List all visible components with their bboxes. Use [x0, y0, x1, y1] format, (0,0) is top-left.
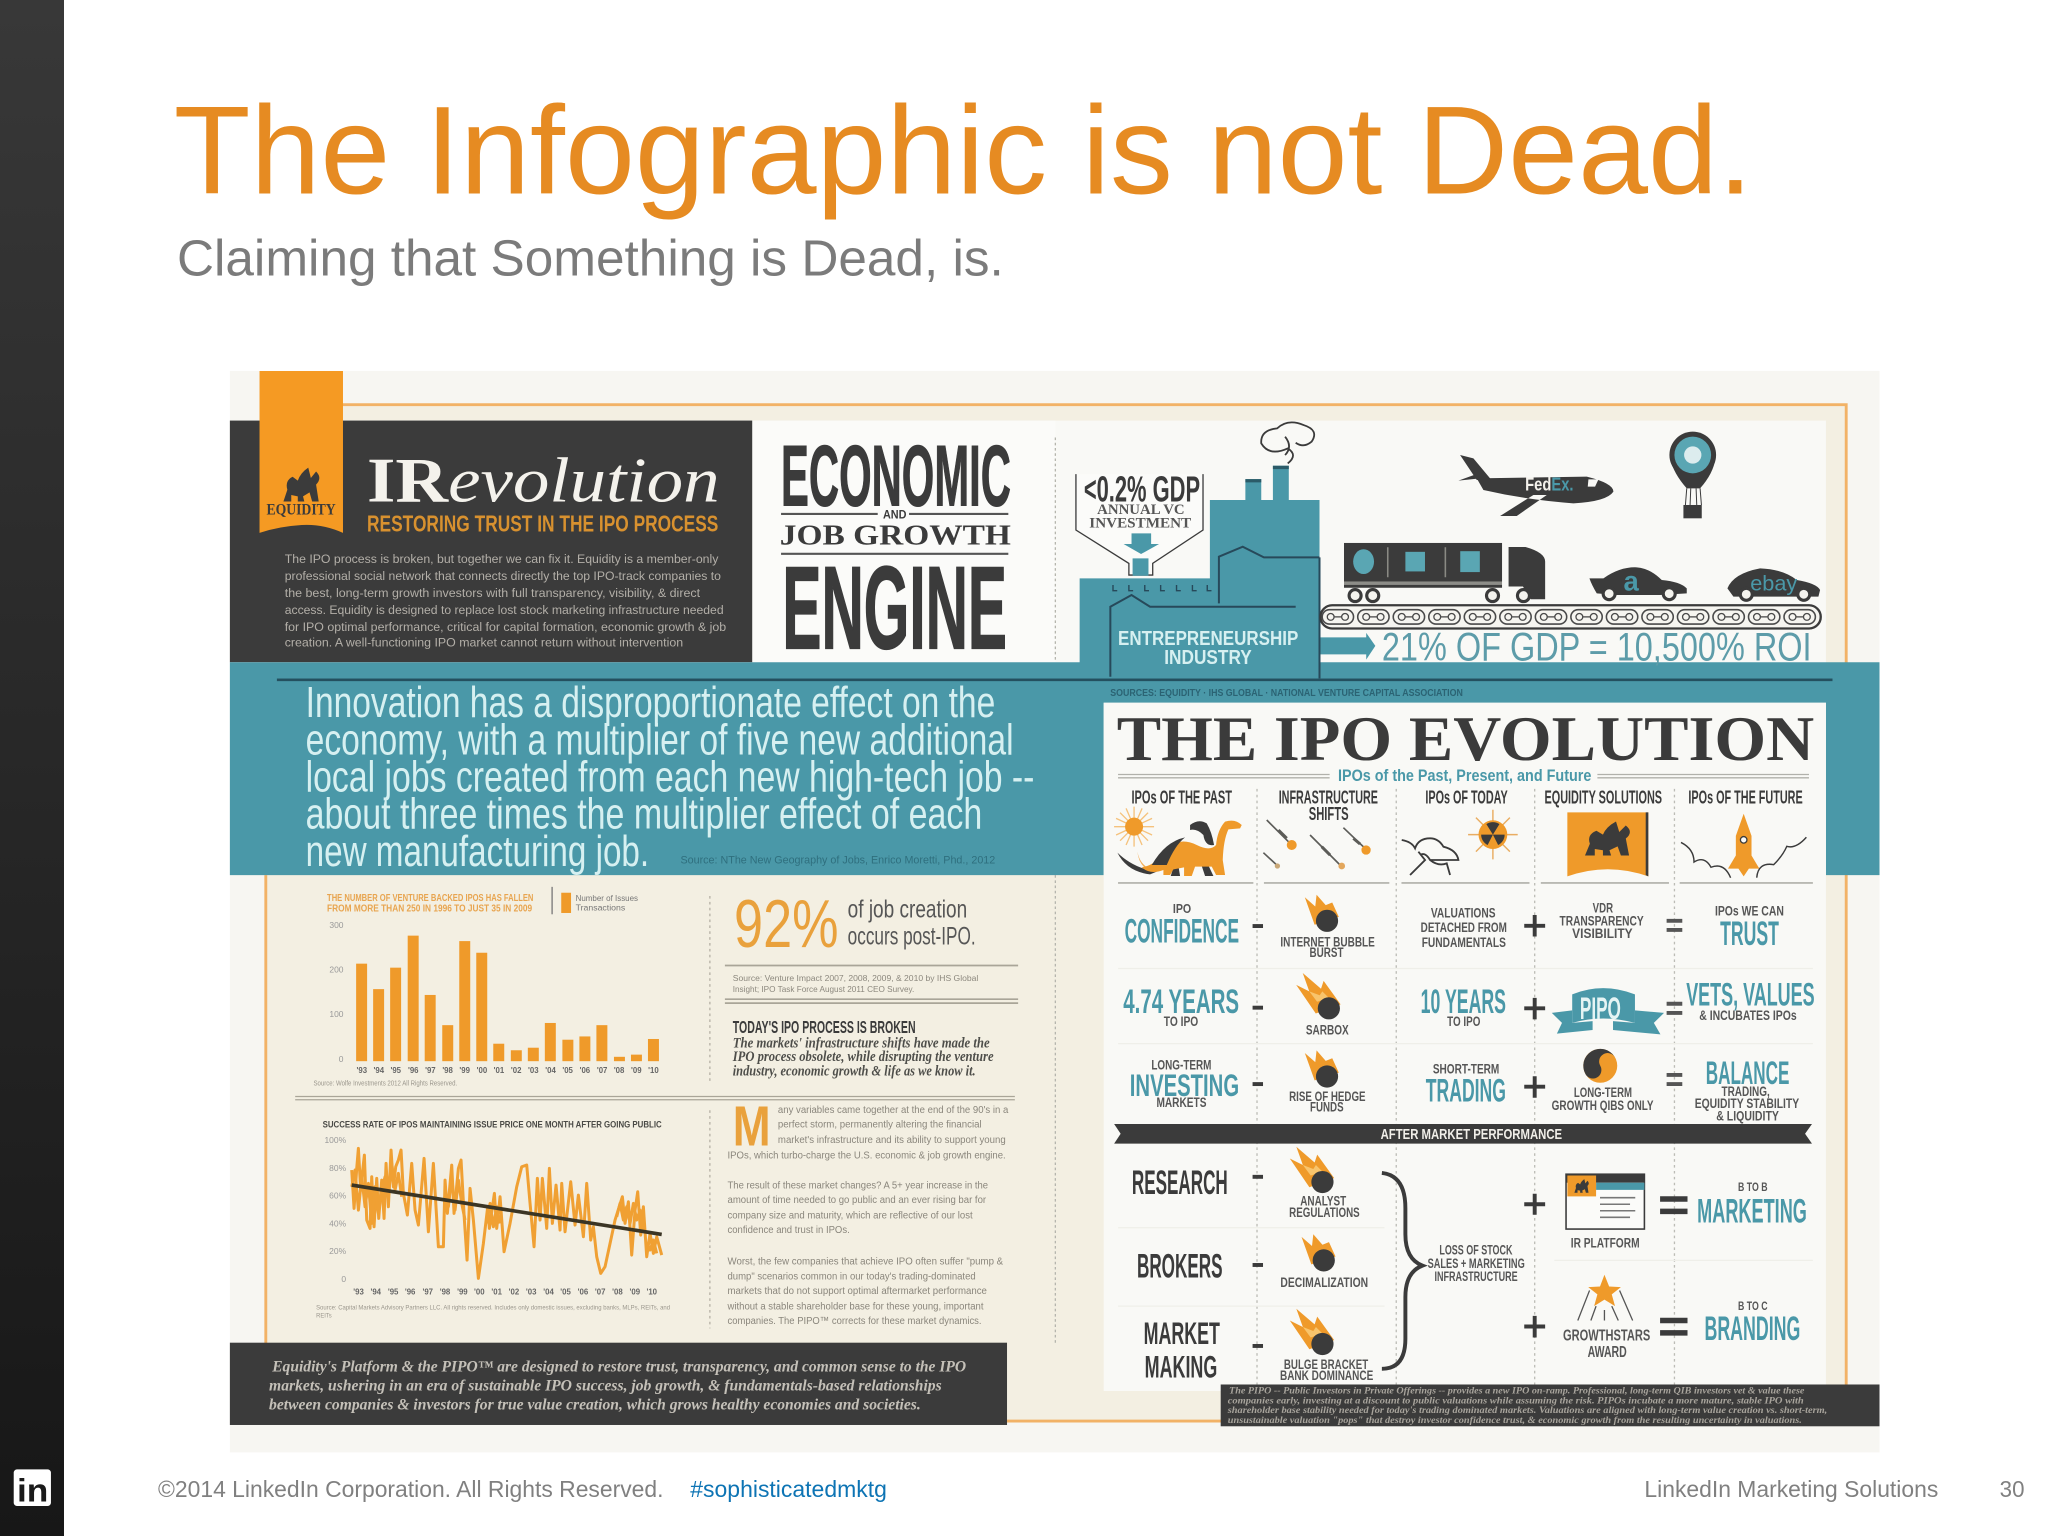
quote: innovation: Innovation has a disproportionate effect on the: [306, 679, 995, 727]
row: years to IPO: & INCUBATES IPOs: [1699, 1008, 1797, 1023]
label: VC investment: [1084, 469, 1200, 532]
text block: process is broken: [732, 1017, 994, 1080]
stat: 92 percent: [725, 887, 1018, 1003]
panel: bar chart: '96: [408, 1066, 419, 1075]
row: years to IPO: 4.74 YEARS: [1123, 983, 1239, 1021]
text block: article: company size and maturity, which are reflective of our lost: [728, 1211, 973, 1222]
row: investing: FUNDS: [1310, 1100, 1344, 1115]
panel: line chart: '02: [509, 1287, 520, 1296]
column headings: SHIFTS: [1309, 803, 1349, 824]
row: market making: BULGE BRACKET: [1284, 1357, 1369, 1372]
drop cap: M: [733, 1094, 771, 1157]
row: investing: TRADING: [1426, 1073, 1506, 1109]
row: brokers: BROKERS: [1137, 1247, 1223, 1285]
icon: growthstars award: AWARD: [1588, 1344, 1627, 1361]
row: confidence: [1125, 895, 1784, 960]
column headings: EQUIDITY SOLUTIONS: [1544, 786, 1662, 807]
intro text: access. Equidity is designed to replace lost stock marketing infrastructure needed: [285, 603, 724, 617]
hopper: [1076, 474, 1203, 575]
row: confidence: VALUATIONS: [1431, 906, 1496, 921]
text block: article: companies. The PIPO™ corrects for these market dynamics.: [728, 1316, 982, 1327]
panel: line chart: '07: [595, 1287, 606, 1296]
row: confidence: VISIBILITY: [1572, 926, 1633, 941]
text block: article: [727, 1094, 1008, 1327]
panel: line chart: '10: [646, 1287, 658, 1296]
text block: article: without a stable shareholder base for these young, important: [727, 1301, 984, 1312]
panel: line chart: '95: [388, 1287, 399, 1296]
ribbon: Equidity: [260, 371, 343, 533]
text block: article: IPOs, which turbo-charge the U.S. economic & job growth engine.: [728, 1150, 1006, 1161]
subheading: IPOs of the Past, Present, and Future: [1338, 766, 1591, 785]
column headings: IPOs OF THE PAST: [1131, 786, 1232, 807]
label: B to C branding: BRANDING: [1704, 1310, 1800, 1348]
label: entrepreneurship industry: INDUSTRY: [1164, 647, 1252, 669]
panel: bar chart: '07: [597, 1066, 608, 1075]
arrow: ROI: [1320, 633, 1375, 660]
row: investing: LONG-TERM: [1574, 1085, 1632, 1100]
panel: bar chart: '01: [494, 1066, 505, 1075]
row: confidence: TRUST: [1720, 915, 1779, 953]
panel: bar chart: '98: [442, 1066, 454, 1075]
row: investing: TRADING,: [1721, 1084, 1770, 1099]
panel: economic engine title: ENGINE: [782, 542, 1007, 673]
icon: plane: FedEx.: [1525, 473, 1573, 494]
infographic: [230, 371, 1880, 1452]
panel: bar chart: '09: [631, 1066, 642, 1075]
panel: line chart: '09: [629, 1287, 641, 1296]
row: investing: EQUIDITY STABILITY: [1695, 1096, 1799, 1111]
stat: 92 percent: Insight; IPO Task Force August 2011 CEO Survey.: [733, 984, 914, 994]
subtitle: Claiming that Something is Dead, is.: [177, 230, 1004, 287]
label: entrepreneurship industry: ENTREPRENEURSHIP: [1118, 628, 1298, 650]
icon: truck: [1344, 543, 1545, 602]
stat: 21% of GDP: 21% OF GDP = 10,500% ROI: [1382, 626, 1812, 670]
row: years to IPO: TO IPO: [1447, 1014, 1481, 1029]
illustration: factory: [1076, 422, 1320, 678]
label: VC investment: INVESTMENT: [1089, 516, 1192, 532]
intro text: [285, 552, 726, 650]
row: confidence: IPO: [1173, 901, 1191, 916]
panel: bar chart: '94: [373, 1066, 385, 1075]
panel: economic engine title: AND: [883, 509, 906, 522]
intro text: the best, long-term growth investors with full transparency, visibility, & direct: [285, 586, 701, 600]
panel: economic engine title: ECONOMIC: [781, 428, 1011, 524]
brace: [1382, 1173, 1422, 1369]
smoke: [1261, 422, 1314, 463]
row: confidence: BURST: [1310, 945, 1344, 960]
panel: economic engine title: JOB GROWTH: [780, 520, 1011, 552]
panel: bar chart: '95: [390, 1066, 402, 1075]
panel: bar chart: 0: [339, 1054, 344, 1064]
panel: bar chart: '99: [459, 1066, 471, 1075]
panel: line chart: [316, 1120, 670, 1320]
row: market making: MARKET: [1144, 1316, 1220, 1351]
row: years to IPO: VETS, VALUES: [1686, 976, 1815, 1013]
quote: innovation: [306, 679, 1034, 876]
stat: 92 percent: Source: Venture Impact 2007, 2008, 2009, & 2010 by IHS Global: [733, 973, 978, 983]
icon: ebay car: ebay: [1750, 572, 1798, 595]
text block: process is broken: industry, economic growth & life as we know it.: [733, 1064, 976, 1080]
row: years to IPO: 10 YEARS: [1421, 983, 1506, 1021]
panel: closing statement: Equidity's Platform & the PIPO™ are designed to restore trust, transparency, and common sense to the IPO: [271, 1358, 966, 1375]
legend: Transactions: [576, 902, 625, 912]
icon: clouds today: [1402, 838, 1458, 875]
icon: IR platform: [1566, 1174, 1644, 1250]
row: confidence: IPOs WE CAN: [1715, 904, 1784, 919]
icon: IR platform: IR PLATFORM: [1571, 1235, 1640, 1250]
icon: equidity banner: [1567, 812, 1648, 876]
banner: after market performance: [1114, 1124, 1812, 1144]
text block: article: markets that do not support optimal aftermarket performance: [728, 1286, 987, 1297]
text block: process is broken: The markets' infrastructure shifts have made the: [733, 1036, 990, 1052]
panel: line chart: '04: [543, 1287, 554, 1296]
panel: closing statement: markets, ushering in an era of sustainable IPO success, job growth, & fundamentals-based relationships: [269, 1377, 942, 1394]
source note: Source: NThe New Geography of Jobs, Enrico Moretti, Phd., 2012: [680, 854, 995, 866]
legend: Number of Issues: [576, 893, 638, 903]
badge: PIPO: PIPO: [1580, 991, 1621, 1026]
row: investing: RISE OF HEDGE: [1289, 1089, 1366, 1104]
panel: bar chart: Source: Wolfe Investments 2012 All Rights Reserved.: [313, 1079, 457, 1087]
panel: PIPO note: The PIPO -- Public Investors in Private Offerings -- provides a new IPO on-ramp. Professional, long-term QIB investors vet & value these: [1229, 1386, 1804, 1396]
text block: article: market's infrastructure and its ability to support young: [778, 1135, 1006, 1146]
row: confidence: VDR: [1593, 900, 1613, 915]
row: investing: SHORT-TERM: [1433, 1062, 1499, 1077]
label: entrepreneurship industry: [1118, 628, 1298, 669]
panel: bar chart: '10: [648, 1066, 659, 1075]
panel: line chart: '05: [560, 1287, 571, 1296]
panel: line chart: REITs: [316, 1313, 332, 1320]
label: VC investment: ANNUAL VC: [1097, 502, 1185, 518]
panel: PIPO note: [1221, 1384, 1880, 1426]
panel: line chart: '00: [474, 1287, 485, 1296]
panel: bar chart: '93: [357, 1066, 368, 1075]
row: investing: INVESTING: [1130, 1068, 1239, 1103]
quote: innovation: new manufacturing job.: [306, 828, 649, 876]
column headings: IPOs OF TODAY: [1425, 786, 1508, 807]
row: brokers: DECIMALIZATION: [1280, 1275, 1368, 1290]
row: years to IPO: [1123, 973, 1815, 1037]
panel: bar chart: '06: [580, 1066, 591, 1075]
row: investing: LONG-TERM: [1151, 1057, 1211, 1072]
stat: 92 percent: of job creation: [848, 897, 967, 924]
text block: article: Worst, the few companies that achieve IPO often suffer "pump &: [728, 1256, 1003, 1267]
panel: IRevolution header: [230, 371, 752, 662]
label: loss of stock sales: INFRASTRUCTURE: [1435, 1269, 1518, 1284]
banner: after market performance: AFTER MARKET PERFORMANCE: [1381, 1127, 1562, 1143]
quote: innovation: local jobs created from each new high-tech job --: [306, 754, 1034, 802]
column headings: INFRASTRUCTURE: [1279, 786, 1378, 807]
text block: article: The result of these market changes? A 5+ year increase in the: [728, 1181, 988, 1192]
panel: line chart: 100%: [324, 1135, 347, 1145]
footer: copyright: ©2014 LinkedIn Corporation. All Rights Reserved.: [158, 1476, 664, 1502]
icon: sun: [1114, 807, 1154, 847]
row: confidence: INTERNET BUBBLE: [1280, 934, 1375, 949]
icon: LinkedIn: in: [17, 1471, 48, 1508]
label: B to B marketing: MARKETING: [1697, 1193, 1807, 1231]
icon: radiation sun: [1468, 810, 1518, 859]
icon: growthstars award: [1563, 1275, 1650, 1361]
row: investing: MARKETS: [1156, 1095, 1206, 1110]
subheading: RESTORING TRUST IN THE IPO PROCESS: [367, 511, 718, 537]
row: confidence: FUNDAMENTALS: [1422, 935, 1506, 950]
text block: article: any variables came together at the end of the 90's in a: [778, 1105, 1008, 1116]
intro text: for IPO optimal performance, critical for capital formation, economic growth & job: [285, 620, 726, 634]
label: B to B marketing: B TO B: [1738, 1180, 1768, 1194]
panel: line chart: 0: [341, 1274, 346, 1284]
footer: page number: 30: [2000, 1476, 2024, 1502]
row: research: [1132, 1147, 1360, 1220]
icon: growthstars award: GROWTHSTARS: [1563, 1328, 1650, 1345]
panel: bar chart: THE NUMBER OF VENTURE BACKED IPOS HAS FALLEN: [327, 893, 533, 904]
panel: line chart: 80%: [329, 1163, 347, 1173]
panel: closing statement: between companies & investors for true value creation, which grows healthy economies and societies.: [269, 1396, 921, 1413]
panel: line chart: '06: [578, 1287, 589, 1296]
panel: bar chart: '04: [545, 1066, 556, 1075]
panel: bar chart: '02: [511, 1066, 522, 1075]
panel: bar chart: [313, 887, 659, 1087]
icon: yin yang: [1577, 1043, 1619, 1083]
panel: bar chart: '05: [562, 1066, 574, 1075]
intro text: professional social network that connects directly the top IPO-track companies to: [285, 569, 721, 583]
panel: line chart: 60%: [329, 1190, 347, 1200]
row: confidence: DETACHED FROM: [1421, 920, 1507, 935]
icon: dinosaur: [1117, 821, 1242, 876]
label: loss of stock sales: SALES + MARKETING: [1428, 1256, 1525, 1271]
intro text: creation. A well-functioning IPO market cannot return without intervention: [285, 636, 683, 650]
panel: bar chart: 100: [329, 1009, 344, 1019]
panel: line chart: 40%: [329, 1218, 347, 1228]
row: brokers: [1137, 1234, 1368, 1290]
label: B to C branding: [1704, 1299, 1800, 1348]
row: confidence: TRANSPARENCY: [1560, 913, 1644, 928]
row: market making: [1144, 1309, 1373, 1384]
badge: PIPO: [1552, 988, 1664, 1034]
panel: IPO evolution: [1104, 703, 1826, 1391]
title: The Infographic is not Dead.: [174, 79, 1753, 220]
left sidebar: [0, 0, 64, 1536]
panel: bar chart: 200: [329, 964, 344, 974]
icon: balloon: [1669, 432, 1716, 518]
panel: line chart: '08: [612, 1287, 623, 1296]
icon: plane: [1458, 455, 1613, 516]
conveyor belt: [1320, 605, 1821, 629]
row: investing: GROWTH QIBS ONLY: [1552, 1098, 1654, 1113]
icon: amazon car: a: [1624, 565, 1640, 596]
panel: bar chart: '03: [528, 1066, 539, 1075]
panel: line chart: '93: [353, 1287, 364, 1296]
text block: article: perfect storm, permanently altering the financial: [778, 1120, 982, 1131]
intro text: The IPO process is broken, but together we can fix it. Equidity is a member-only: [285, 552, 719, 566]
panel: closing statement: [230, 1343, 1007, 1425]
panel: bar chart: FROM MORE THAN 250 IN 1996 TO JUST 35 IN 2009: [327, 903, 533, 914]
panel: bar chart: 300: [329, 920, 344, 930]
column headings: [1131, 786, 1803, 824]
text block: article: amount of time needed to go public and an ever rising bar for: [728, 1195, 987, 1206]
panel: bar chart: '97: [425, 1066, 436, 1075]
text block: article: confidence and trust in IPOs.: [728, 1225, 850, 1236]
panel: economic engine title: [752, 421, 1055, 673]
legend: [551, 887, 638, 914]
column headings: IPOs OF THE FUTURE: [1688, 786, 1803, 807]
stat: 92 percent: occurs post-IPO.: [848, 923, 976, 950]
text block: process is broken: TODAY'S IPO PROCESS IS BROKEN: [733, 1017, 916, 1037]
footer: hashtag: #sophisticatedmktg: [690, 1476, 887, 1502]
row: investing: BALANCE: [1706, 1054, 1789, 1091]
source note right: SOURCES: EQUIDITY · IHS GLOBAL · NATIONAL VENTURE CAPITAL ASSOCIATION: [1110, 688, 1463, 699]
stat: 92 percent: 92%: [734, 887, 839, 962]
ribbon: Equidity: EQUIDITY: [266, 502, 336, 519]
panel: bar chart: '08: [614, 1066, 625, 1075]
heading: IRevolution: IRevolution: [367, 445, 720, 516]
label: B to C branding: B TO C: [1738, 1299, 1768, 1313]
teal band: [230, 662, 1880, 876]
quote: innovation: economy, with a multiplier of five new additional: [306, 716, 1014, 764]
text block: article: dump" scenarios common in our today's trading-dominated: [728, 1271, 976, 1282]
row: investing: & LIQUIDITY: [1716, 1109, 1779, 1124]
row: years to IPO: TO IPO: [1164, 1014, 1198, 1029]
label: VC investment: <0.2% GDP: [1084, 469, 1200, 510]
heading: the IPO evolution: THE IPO EVOLUTION: [1117, 703, 1814, 774]
arrow into hopper: [1124, 533, 1159, 554]
row: market making: BANK DOMINANCE: [1280, 1368, 1373, 1383]
panel: PIPO note: companies early, investing at a discount to public valuations while assuming the risk. PIPOs incubate a more mature, stable IPO with: [1228, 1395, 1804, 1405]
panel: line chart: SUCCESS RATE OF IPOS MAINTAINING ISSUE PRICE ONE MONTH AFTER GOING PUBLIC: [323, 1120, 662, 1130]
panel: line chart: Source: Capital Markets Advisory Partners LLC. All rights reserved. Includes only domestic issues, excluding banks, MLPs, REITs, and: [316, 1305, 670, 1312]
row: years to IPO: SARBOX: [1306, 1022, 1349, 1037]
icon: rocket: [1681, 814, 1806, 878]
quote: innovation: about three times the multiplier effect of each: [306, 791, 982, 839]
label: loss of stock sales: LOSS OF STOCK: [1439, 1243, 1513, 1258]
panel: PIPO note: unsustainable valuation "pops" that destroy investor confidence trust, & economic growth from the resulting uncertainty in valuations.: [1228, 1415, 1802, 1425]
panel: line chart: '98: [440, 1287, 451, 1296]
row: market making: MAKING: [1145, 1349, 1217, 1384]
panel: line chart: '96: [405, 1287, 416, 1296]
panel: line chart: 20%: [329, 1246, 347, 1256]
icon: amazon car: [1589, 565, 1687, 600]
panel: line chart: '94: [370, 1287, 382, 1296]
row: research: ANALYST: [1300, 1194, 1347, 1209]
icon: ebay car: [1727, 568, 1820, 600]
icon: falling comets: [1263, 820, 1371, 869]
row: investing: [1130, 1043, 1799, 1124]
panel: line chart: '01: [491, 1287, 503, 1296]
panel: line chart: '99: [457, 1287, 468, 1296]
text block: process is broken: IPO process obsolete, while disrupting the venture: [732, 1049, 994, 1065]
panel: line chart: '97: [422, 1287, 434, 1296]
footer: brand: LinkedIn Marketing Solutions: [1644, 1476, 1938, 1502]
row: research: RESEARCH: [1132, 1164, 1228, 1202]
row: confidence: CONFIDENCE: [1125, 912, 1239, 950]
panel: PIPO note: shareholder base stability needed for today's trading dominated markets. Valuations are aligned with long-term value creation vs. short-term,: [1227, 1405, 1827, 1415]
panel: line chart: '03: [526, 1287, 537, 1296]
label: B to B marketing: [1697, 1180, 1807, 1231]
row: research: REGULATIONS: [1289, 1205, 1360, 1220]
panel: bar chart: '00: [477, 1066, 488, 1075]
label: loss of stock sales: [1428, 1243, 1525, 1284]
